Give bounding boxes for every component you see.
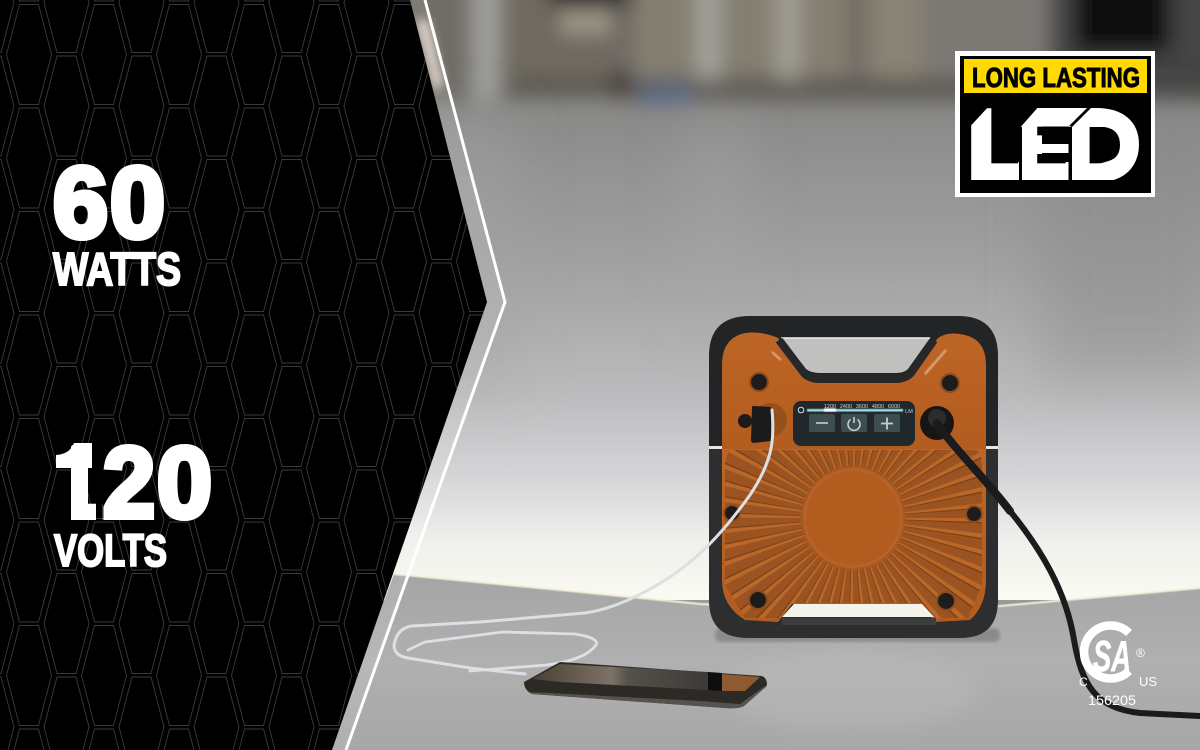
letter cuts [965, 105, 1120, 182]
phone edge [530, 686, 767, 708]
number 120: 1 [52, 427, 102, 539]
brightness icon [798, 407, 804, 413]
center disc [802, 467, 904, 569]
stat: 60 watts [53, 147, 181, 295]
number 120: 0 [157, 427, 212, 539]
orange upper housing [722, 333, 986, 450]
number 120: 2 [103, 427, 155, 539]
flag of numeral 1 [56, 443, 92, 468]
power button [841, 414, 867, 432]
power cord [937, 423, 1200, 716]
right power port [920, 406, 954, 440]
stat: 120 volts [48, 427, 212, 576]
certification: CSA mark: US [1139, 674, 1157, 689]
blurred warehouse background [380, 0, 1200, 110]
certification: CSA mark: C [1079, 675, 1088, 689]
sculpted top strokes [1022, 108, 1087, 127]
plus button [874, 414, 900, 432]
radial fins [725, 450, 982, 618]
yellow banner: LONG LASTING [972, 62, 1140, 93]
certification: CSA mark: 156205 [1088, 692, 1136, 708]
lower floor [330, 574, 1200, 750]
certification: CSA mark: SA [1093, 632, 1131, 681]
floor reflection [720, 650, 980, 730]
lumen scale: LM [905, 409, 913, 415]
honeycomb pattern [0, 0, 487, 750]
LED lettering [971, 108, 1139, 180]
handle opening [781, 338, 930, 373]
number 60: 0 [110, 147, 165, 259]
foot removal on numeral 1 [48, 440, 102, 523]
label volts: VOLTS [54, 525, 167, 576]
badge: long lasting LED [955, 51, 1155, 199]
orange lower housing [722, 449, 986, 622]
certification: CSA mark [1079, 626, 1157, 708]
lumen scale: 3600 [856, 404, 868, 410]
white chevron line [346, 0, 505, 750]
floor shadow [715, 628, 1000, 642]
smartphone [524, 662, 767, 708]
work light [394, 316, 1200, 716]
translucent chevron band [332, 0, 505, 750]
LED lettering: E [1016, 92, 1072, 199]
LED lettering: D [1063, 92, 1139, 199]
certification: CSA mark: ® [1136, 646, 1145, 660]
label watts: WATTS [53, 243, 181, 295]
minus button [809, 414, 835, 432]
lumen scale [824, 404, 913, 415]
bottom opening [782, 604, 934, 617]
lumen scale: 4800 [872, 404, 884, 410]
left USB port with plug [738, 403, 787, 443]
phone screen reflection [532, 664, 708, 690]
panel: black chevron with honeycomb [0, 0, 505, 750]
USB cable [394, 410, 773, 674]
lumen scale: 2400 [840, 404, 852, 410]
floor lighting [440, 120, 1200, 380]
number 60: 6 [53, 147, 108, 259]
highlights [772, 350, 946, 374]
rubber frame [709, 316, 998, 638]
LED lettering: L [969, 92, 1023, 199]
screws [724, 373, 982, 610]
lumen scale: 6000 [888, 404, 900, 410]
lumen scale: 1200 [824, 404, 836, 410]
control panel [793, 401, 915, 446]
